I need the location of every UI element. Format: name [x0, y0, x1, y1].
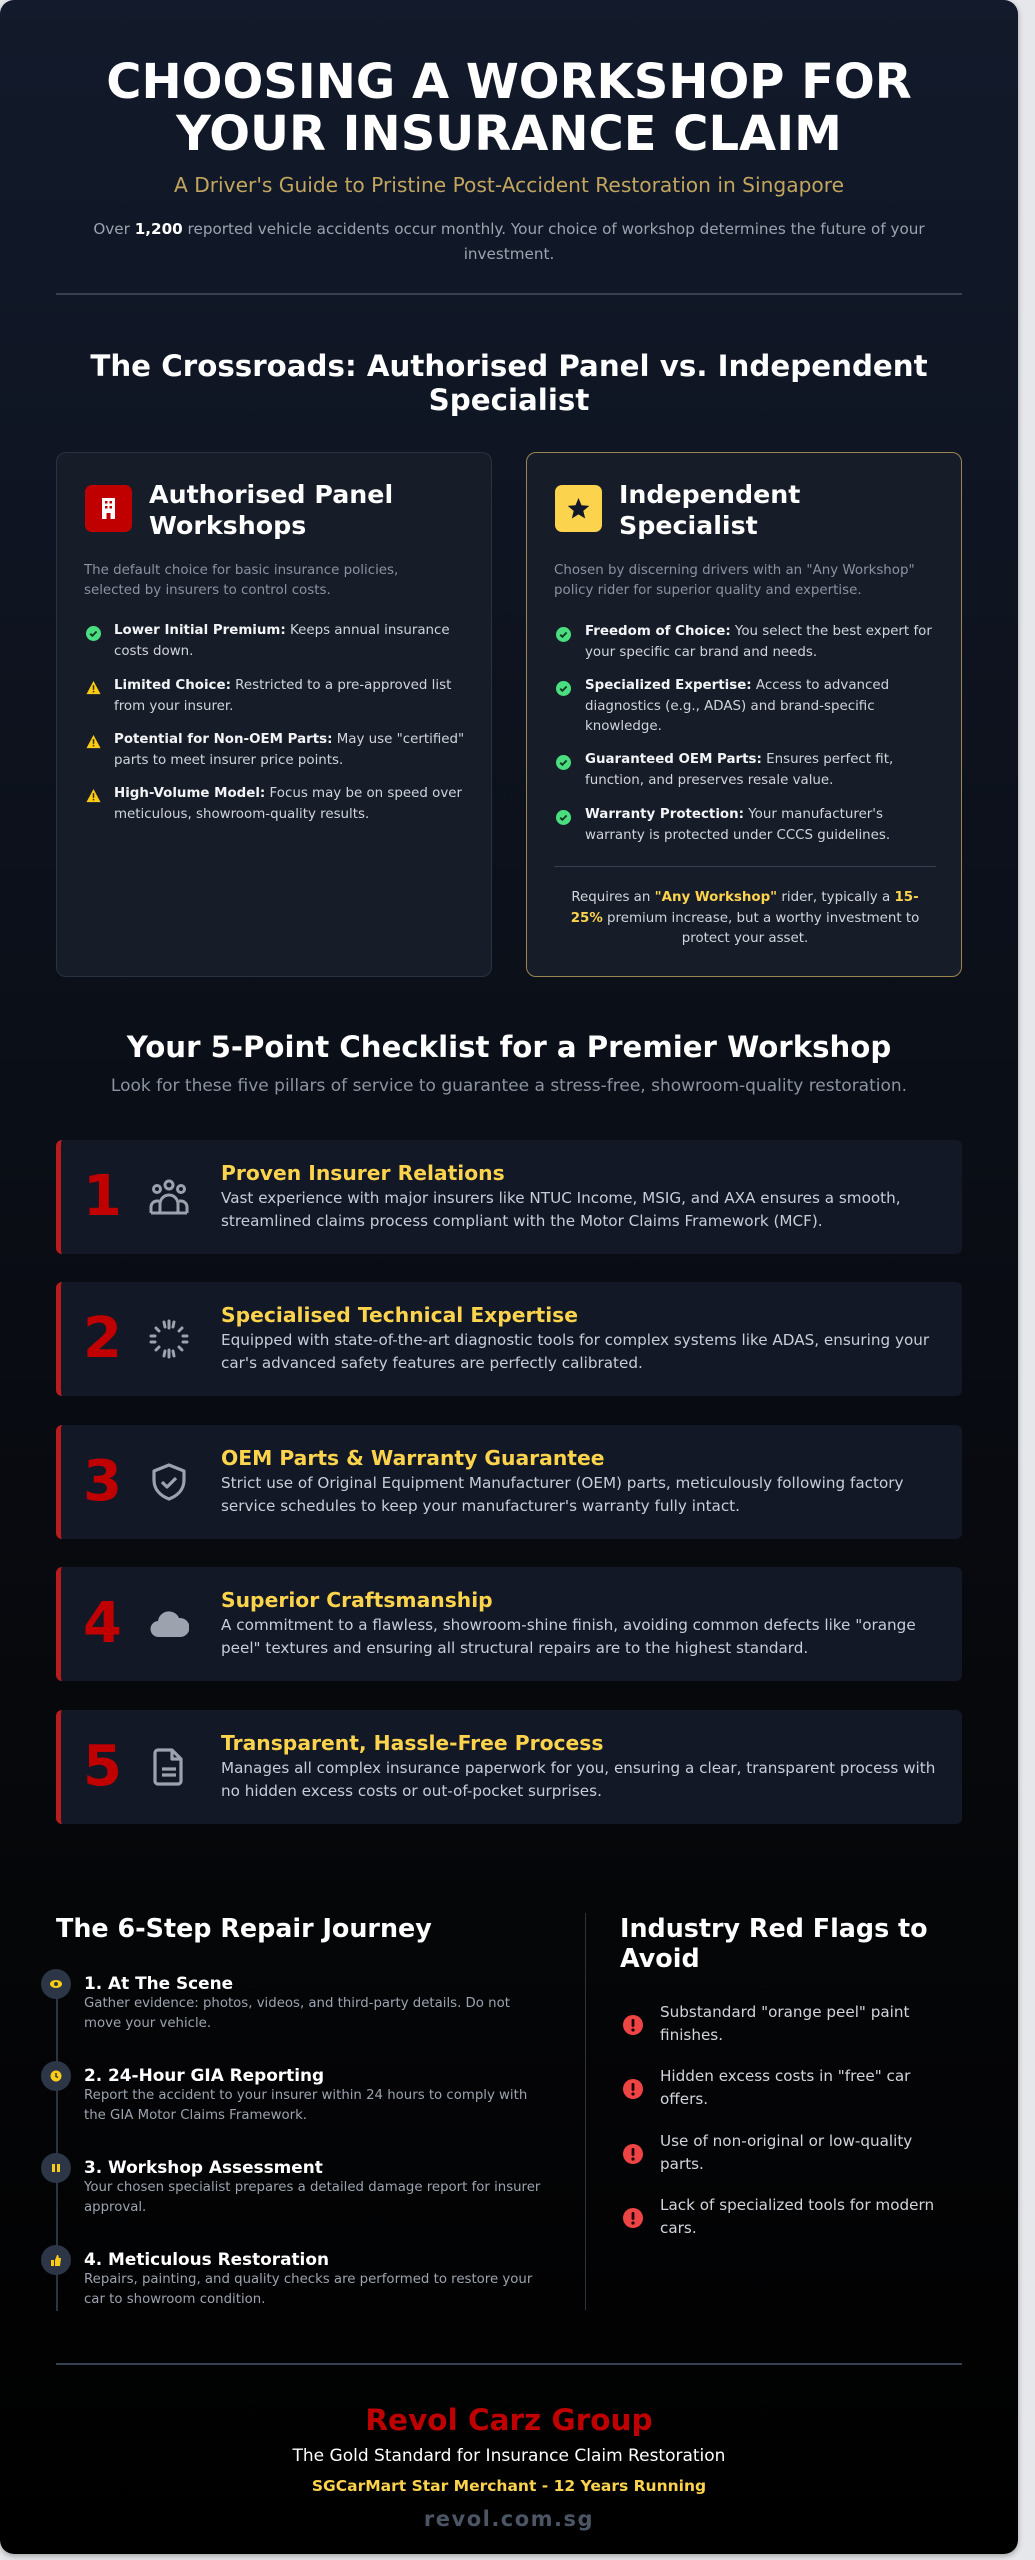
icon: document: [153, 1748, 183, 1786]
list item: lower premium: Lower Initial Premium: Keeps annual insurance costs down.: [114, 623, 450, 658]
panel title: Independent: [619, 480, 800, 509]
checklist item 5: Transparent, Hassle-Free Process: [221, 1731, 603, 1755]
step 1: [41, 1969, 510, 2031]
checklist item 2: [56, 1282, 962, 1396]
heading: checklist: Your 5-Point Checklist for a Premier Workshop: [127, 1030, 891, 1064]
icon: thumbs up: [41, 2245, 71, 2275]
panel title: Authorised Panel: [149, 480, 393, 509]
icon: spinner: [150, 1320, 188, 1358]
checklist item 1: [56, 1140, 962, 1254]
step 1: 1. At The Scene: [84, 1973, 233, 1993]
brand name: Revol Carz Group: [365, 2403, 653, 2437]
step 2: 2. 24-Hour GIA Reporting: [84, 2065, 324, 2085]
footer: [292, 2403, 725, 2531]
list item: warranty: Warranty Protection: Your manufacturer's warranty is protected under CCCS guidelines.: [585, 807, 890, 842]
step 4: [41, 2245, 532, 2307]
heading: crossroads: The Crossroads: Authorised Panel vs. Independent Specialist: [90, 349, 928, 417]
checklist item 2: Equipped with state-of-the-art diagnostic tools for complex systems like ADAS, ensuring your car's advanced safety features are perfectly calibrated.: [221, 1331, 929, 1372]
subtitle: A Driver's Guide to Pristine Post-Accident Restoration in Singapore: [174, 173, 844, 197]
checklist item 3: [56, 1425, 962, 1539]
checklist subtitle: Look for these five pillars of service to guarantee a stress-free, showroom-quality restoration.: [111, 1076, 907, 1096]
checklist item 2: Specialised Technical Expertise: [221, 1303, 578, 1327]
panel description: The default choice for basic insurance policies, selected by insurers to control costs.: [84, 563, 398, 598]
panel: independent specialist: [526, 452, 962, 977]
checklist item 3: Strict use of Original Equipment Manufacturer (OEM) parts, meticulously following factory service schedules to keep your manufacturer's warranty fully intact.: [221, 1474, 903, 1515]
icon: cloud: [150, 1611, 189, 1637]
checklist item 5: Manages all complex insurance paperwork for you, ensuring a clear, transparent process with no hidden excess costs or out-of-pocket surprises.: [221, 1759, 935, 1800]
icon: shield check: [152, 1463, 186, 1501]
title: CHOOSING A WORKSHOP FOR: [106, 54, 912, 110]
checklist item 4: [56, 1567, 962, 1681]
checklist item 1: Vast experience with major insurers like NTUC Income, MSIG, and AXA ensures a smooth, streamlined claims process compliant with the Motor Claims Framework (MCF).: [221, 1189, 901, 1230]
icon: warning: [86, 735, 100, 748]
panel title: Specialist: [619, 511, 758, 540]
title: [106, 54, 912, 162]
step 2: Report the accident to your insurer within 24 hours to comply with the GIA Motor Claims Framework.: [84, 2088, 527, 2123]
red flag 2: Hidden excess costs in "free" car offers.: [660, 2067, 910, 2108]
panel title: Workshops: [149, 511, 306, 540]
checklist item 2: 2: [83, 1306, 122, 1371]
list item: high volume: High-Volume Model: Focus may be on speed over meticulous, showroom-quality results.: [114, 786, 462, 822]
title: YOUR INSURANCE CLAIM: [176, 106, 842, 162]
checklist item 4: 4: [83, 1591, 122, 1656]
award: SGCarMart Star Merchant - 12 Years Running: [312, 2477, 706, 2495]
red flag 3: Use of non-original or low-quality parts.: [660, 2132, 912, 2173]
red flag 4: Lack of specialized tools for modern cars.: [660, 2196, 934, 2237]
checklist item 3: OEM Parts & Warranty Guarantee: [221, 1446, 604, 1470]
checklist item 5: 5: [83, 1734, 122, 1799]
list item: expertise: Specialized Expertise: Access to advanced diagnostics (e.g., ADAS) and brand-specific knowledge.: [585, 678, 889, 734]
tagline: The Gold Standard for Insurance Claim Restoration: [293, 2446, 725, 2466]
checklist item 4: Superior Craftsmanship: [221, 1588, 493, 1612]
icon: check: [86, 626, 101, 641]
step 4: 4. Meticulous Restoration: [84, 2249, 329, 2269]
icon: clock: [41, 2061, 71, 2091]
list item: OEM parts: Guaranteed OEM Parts: Ensures perfect fit, function, and preserves resale value.: [585, 752, 893, 788]
icon: eye: [41, 1969, 71, 1999]
list item: freedom: Freedom of Choice: You select the best expert for your specific car brand and needs.: [585, 624, 932, 660]
step 1: Gather evidence: photos, videos, and third-party details. Do not move your vehicle.: [84, 1996, 510, 2031]
panel title: [619, 480, 800, 540]
panel description: Chosen by discerning drivers with an "Any Workshop" policy rider for superior quality and expertise.: [554, 563, 915, 598]
heading: red flags: Industry Red Flags to Avoid: [620, 1913, 928, 1973]
icon: people: [150, 1180, 188, 1214]
step 2: [41, 2061, 527, 2123]
checklist item 1: Proven Insurer Relations: [221, 1161, 505, 1185]
icon: warning: [86, 681, 100, 694]
callout: rider note: Requires an "Any Workshop" rider, typically a 15-25% premium increase, but a worthy investment to protect your asset.: [571, 890, 919, 946]
intro text: Over 1,200 reported vehicle accidents occur monthly. Your choice of workshop determines the future of your investment.: [93, 220, 925, 263]
list item: non-OEM: Potential for Non-OEM Parts: May use "certified" parts to meet insurer price points.: [114, 732, 464, 768]
step 3: [41, 2153, 540, 2215]
checklist item 4: A commitment to a flawless, showroom-shine finish, avoiding common defects like "orange peel" textures and ensuring all structural repairs are to the highest standard.: [221, 1616, 916, 1657]
icon: warning: [86, 789, 100, 802]
red flag 1: Substandard "orange peel" paint finishes.: [660, 2003, 909, 2044]
step 4: Repairs, painting, and quality checks are performed to restore your car to showroom condition.: [84, 2272, 532, 2307]
checklist item 1: 1: [83, 1164, 122, 1229]
panel: authorised panel: [56, 452, 492, 977]
icon: clipboard: [41, 2153, 71, 2183]
checklist item 3: 3: [83, 1449, 122, 1514]
panel title: [149, 480, 393, 540]
step 3: 3. Workshop Assessment: [84, 2157, 323, 2177]
heading: repair journey: The 6-Step Repair Journey: [56, 1913, 432, 1943]
step 3: Your chosen specialist prepares a detailed damage report for insurer approval.: [84, 2180, 540, 2215]
website: revol.com.sg: [424, 2507, 594, 2531]
list item: limited choice: Limited Choice: Restricted to a pre-approved list from your insurer.: [114, 678, 451, 714]
icon: building: [85, 485, 132, 532]
checklist item 5: [56, 1710, 962, 1824]
icon: star: [555, 485, 602, 532]
